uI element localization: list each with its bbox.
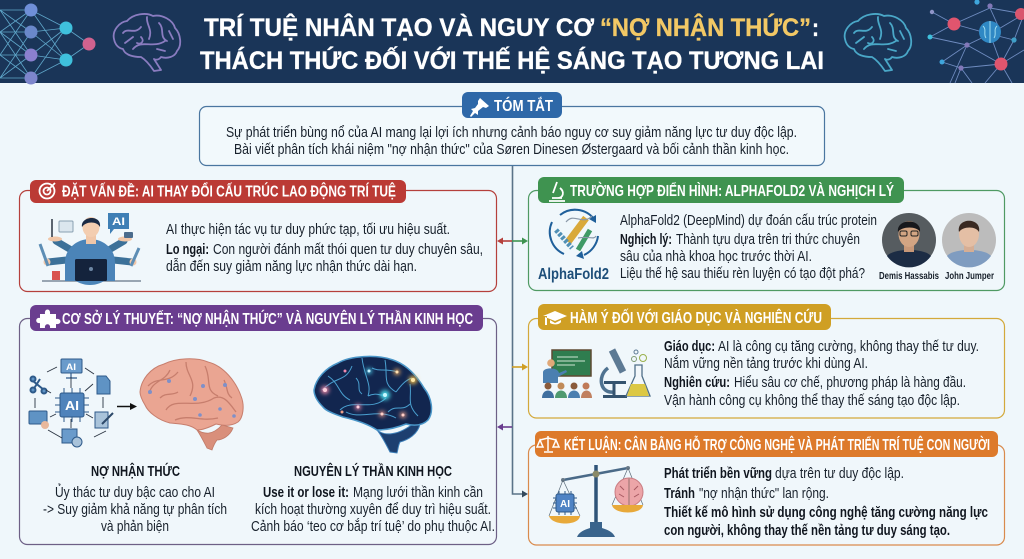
text: alphafold paradox: Liệu thế hệ sau thiếu rèn luyện có tạo đột phá? xyxy=(620,265,865,282)
text: conclusion: dựa trên tư duy độc lập. xyxy=(775,465,904,482)
text: implications: Hiểu sâu cơ chế, phương pháp là hàng đầu. xyxy=(734,374,966,391)
heading: tóm tắt xyxy=(462,92,562,118)
text: alphafold paradox xyxy=(620,212,877,282)
illustration: glowing neural brain xyxy=(314,356,431,453)
text: nguyên lý thần kinh học: NGUYÊN LÝ THẦN KINH HỌC xyxy=(294,462,452,480)
diagram: AI delegation cycle xyxy=(29,359,137,447)
text: implications: Vận hành công cụ không thể thay thế sáng tạo độc lập. xyxy=(664,392,960,409)
title: “NỢ NHẬN THỨC” xyxy=(600,12,811,42)
text: nguyên lý thần kinh học: Use it or lose it: xyxy=(263,484,349,501)
diagram: AI delegation cycle: AI xyxy=(65,398,79,413)
illustration: pink brain xyxy=(140,359,243,450)
icon: multitasking person: AI xyxy=(112,216,125,228)
icon: balance scale AI vs brain: AI xyxy=(560,499,570,510)
connector arrows xyxy=(497,165,528,498)
label: alphafold2: AlphaFold2 xyxy=(538,266,609,283)
text: alphafold paradox: Thành tựu dựa trên tri thức chuyên xyxy=(676,231,860,248)
icon: balance scale AI vs brain xyxy=(549,465,643,537)
text: nguyên lý thần kinh học xyxy=(251,462,495,535)
heading: đặt vấn đề xyxy=(30,180,406,203)
text: nguyên lý thần kinh học: Mạng lưới thần kinh cần xyxy=(353,484,483,501)
labels: portrait names: John Jumper xyxy=(945,270,994,282)
icon: multitasking person xyxy=(40,213,141,285)
icon: microscope xyxy=(549,182,565,201)
text: nợ nhận thức: -> Suy giảm khả năng tự phân tích xyxy=(43,501,227,518)
panel: summary xyxy=(200,92,824,166)
text: nguyên lý thần kinh học: Cảnh báo ‘teo cơ bắp trí tuệ’ do phụ thuộc AI. xyxy=(251,518,495,535)
text: problem: dẫn đến suy giảm năng lực nhận thức dài hạn. xyxy=(166,258,417,275)
icon: left brain outline xyxy=(114,14,180,71)
arrow: AI to brain xyxy=(117,403,137,410)
heading: tóm tắt: TÓM TẮT xyxy=(494,96,553,115)
portrait: Demis Hassabis xyxy=(882,213,936,267)
icon: scales xyxy=(537,436,559,452)
heading: cơ sở lý thuyết xyxy=(30,305,483,331)
heading: alphafold2: TRƯỜNG HỢP ĐIỂN HÌNH: ALPHAFOLD2 VÀ NGHỊCH LÝ xyxy=(570,181,894,200)
text: implications: Giáo dục: xyxy=(664,338,715,355)
labels: portrait names: Demis Hassabis xyxy=(879,270,939,282)
summary text: Bài viết phân tích khái niệm "nợ nhận thức" của Søren Dinesen Østergaard và bối cảnh thần kinh học. xyxy=(234,141,789,158)
title xyxy=(200,12,824,75)
panel: hàm ý xyxy=(528,304,1004,418)
icon: microscope and flask xyxy=(601,350,650,398)
icon: teacher and students xyxy=(542,350,592,398)
text: nợ nhận thức xyxy=(43,462,227,535)
icon: graduation cap xyxy=(543,311,567,325)
panel: cơ sở lý thuyết xyxy=(20,305,496,544)
text: nợ nhận thức: Ủy thác tư duy bậc cao cho AI xyxy=(55,483,215,501)
panel: đặt vấn đề xyxy=(20,180,496,292)
text: alphafold paradox: Nghịch lý: xyxy=(620,231,672,248)
text: conclusion xyxy=(664,465,988,539)
heading: hàm ý: HÀM Ý ĐỐI VỚI GIÁO DỤC VÀ NGHIÊN CỨU xyxy=(570,307,822,327)
text: nợ nhận thức: NỢ NHẬN THỨC xyxy=(91,462,180,480)
text: implications: Nghiên cứu: xyxy=(664,374,730,391)
text: implications xyxy=(664,338,979,409)
portrait: John Jumper xyxy=(942,213,996,267)
heading: đặt vấn đề: ĐẶT VẤN ĐỀ: AI THAY ĐỔI CẤU TRÚC LAO ĐỘNG TRÍ TUỆ xyxy=(62,182,396,200)
icon: right brain outline xyxy=(845,14,911,71)
icon: right network with brains xyxy=(928,0,1024,83)
icon: puzzle xyxy=(36,310,60,328)
panel: kết luận xyxy=(528,431,1004,545)
panel: trường hợp điển hình xyxy=(528,177,1004,290)
text: implications: Nắm vững nền tảng trước khi dùng AI. xyxy=(664,355,868,372)
heading: cơ sở lý thuyết: CƠ SỞ LÝ THUYẾT: “NỢ NHẬN THỨC” VÀ NGUYÊN LÝ THẦN KINH HỌC xyxy=(62,309,473,328)
text: nợ nhận thức: và phản biện xyxy=(101,518,169,535)
icon: pin xyxy=(470,98,489,117)
title: : xyxy=(812,14,819,42)
text: conclusion: Phát triển bền vững xyxy=(664,465,772,482)
text: alphafold paradox: AlphaFold2 (DeepMind) dự đoán cấu trúc protein xyxy=(620,212,877,229)
title: TRÍ TUỆ NHÂN TẠO VÀ NGUY CƠ xyxy=(204,12,595,42)
diagram: AI delegation cycle: AI xyxy=(66,362,76,372)
heading: kết luận xyxy=(535,431,998,457)
heading: hàm ý xyxy=(538,304,831,330)
text: problem: Lo ngại: xyxy=(166,241,209,258)
text: conclusion: "nợ nhận thức" lan rộng. xyxy=(699,485,829,502)
title: THÁCH THỨC ĐỐI VỚI THẾ HỆ SÁNG TẠO TƯƠNG LAI xyxy=(200,45,824,75)
header banner xyxy=(0,0,1024,84)
icon: target xyxy=(40,183,55,198)
heading: alphafold2 xyxy=(538,177,904,203)
icon: left neural network xyxy=(0,4,96,84)
text: conclusion: Tránh xyxy=(664,485,695,502)
text: problem: AI thực hiện tác vụ tư duy phức tạp, tối ưu hiệu suất. xyxy=(166,221,450,238)
summary text xyxy=(226,124,797,158)
summary text: Sự phát triển bùng nổ của AI mang lại lợi ích nhưng cảnh báo nguy cơ suy giảm năng lực tư duy độc lập. xyxy=(226,124,797,141)
icon: alphafold protein logo xyxy=(550,210,598,259)
text: problem xyxy=(166,221,483,275)
text: nguyên lý thần kinh học: kích hoạt thường xuyên để duy trì hiệu suất. xyxy=(255,501,491,518)
text: problem: Con người đánh mất thói quen tư duy chuyên sâu, xyxy=(213,241,483,258)
text: alphafold paradox: sâu của nhà khoa học trước thời AI. xyxy=(620,248,812,265)
